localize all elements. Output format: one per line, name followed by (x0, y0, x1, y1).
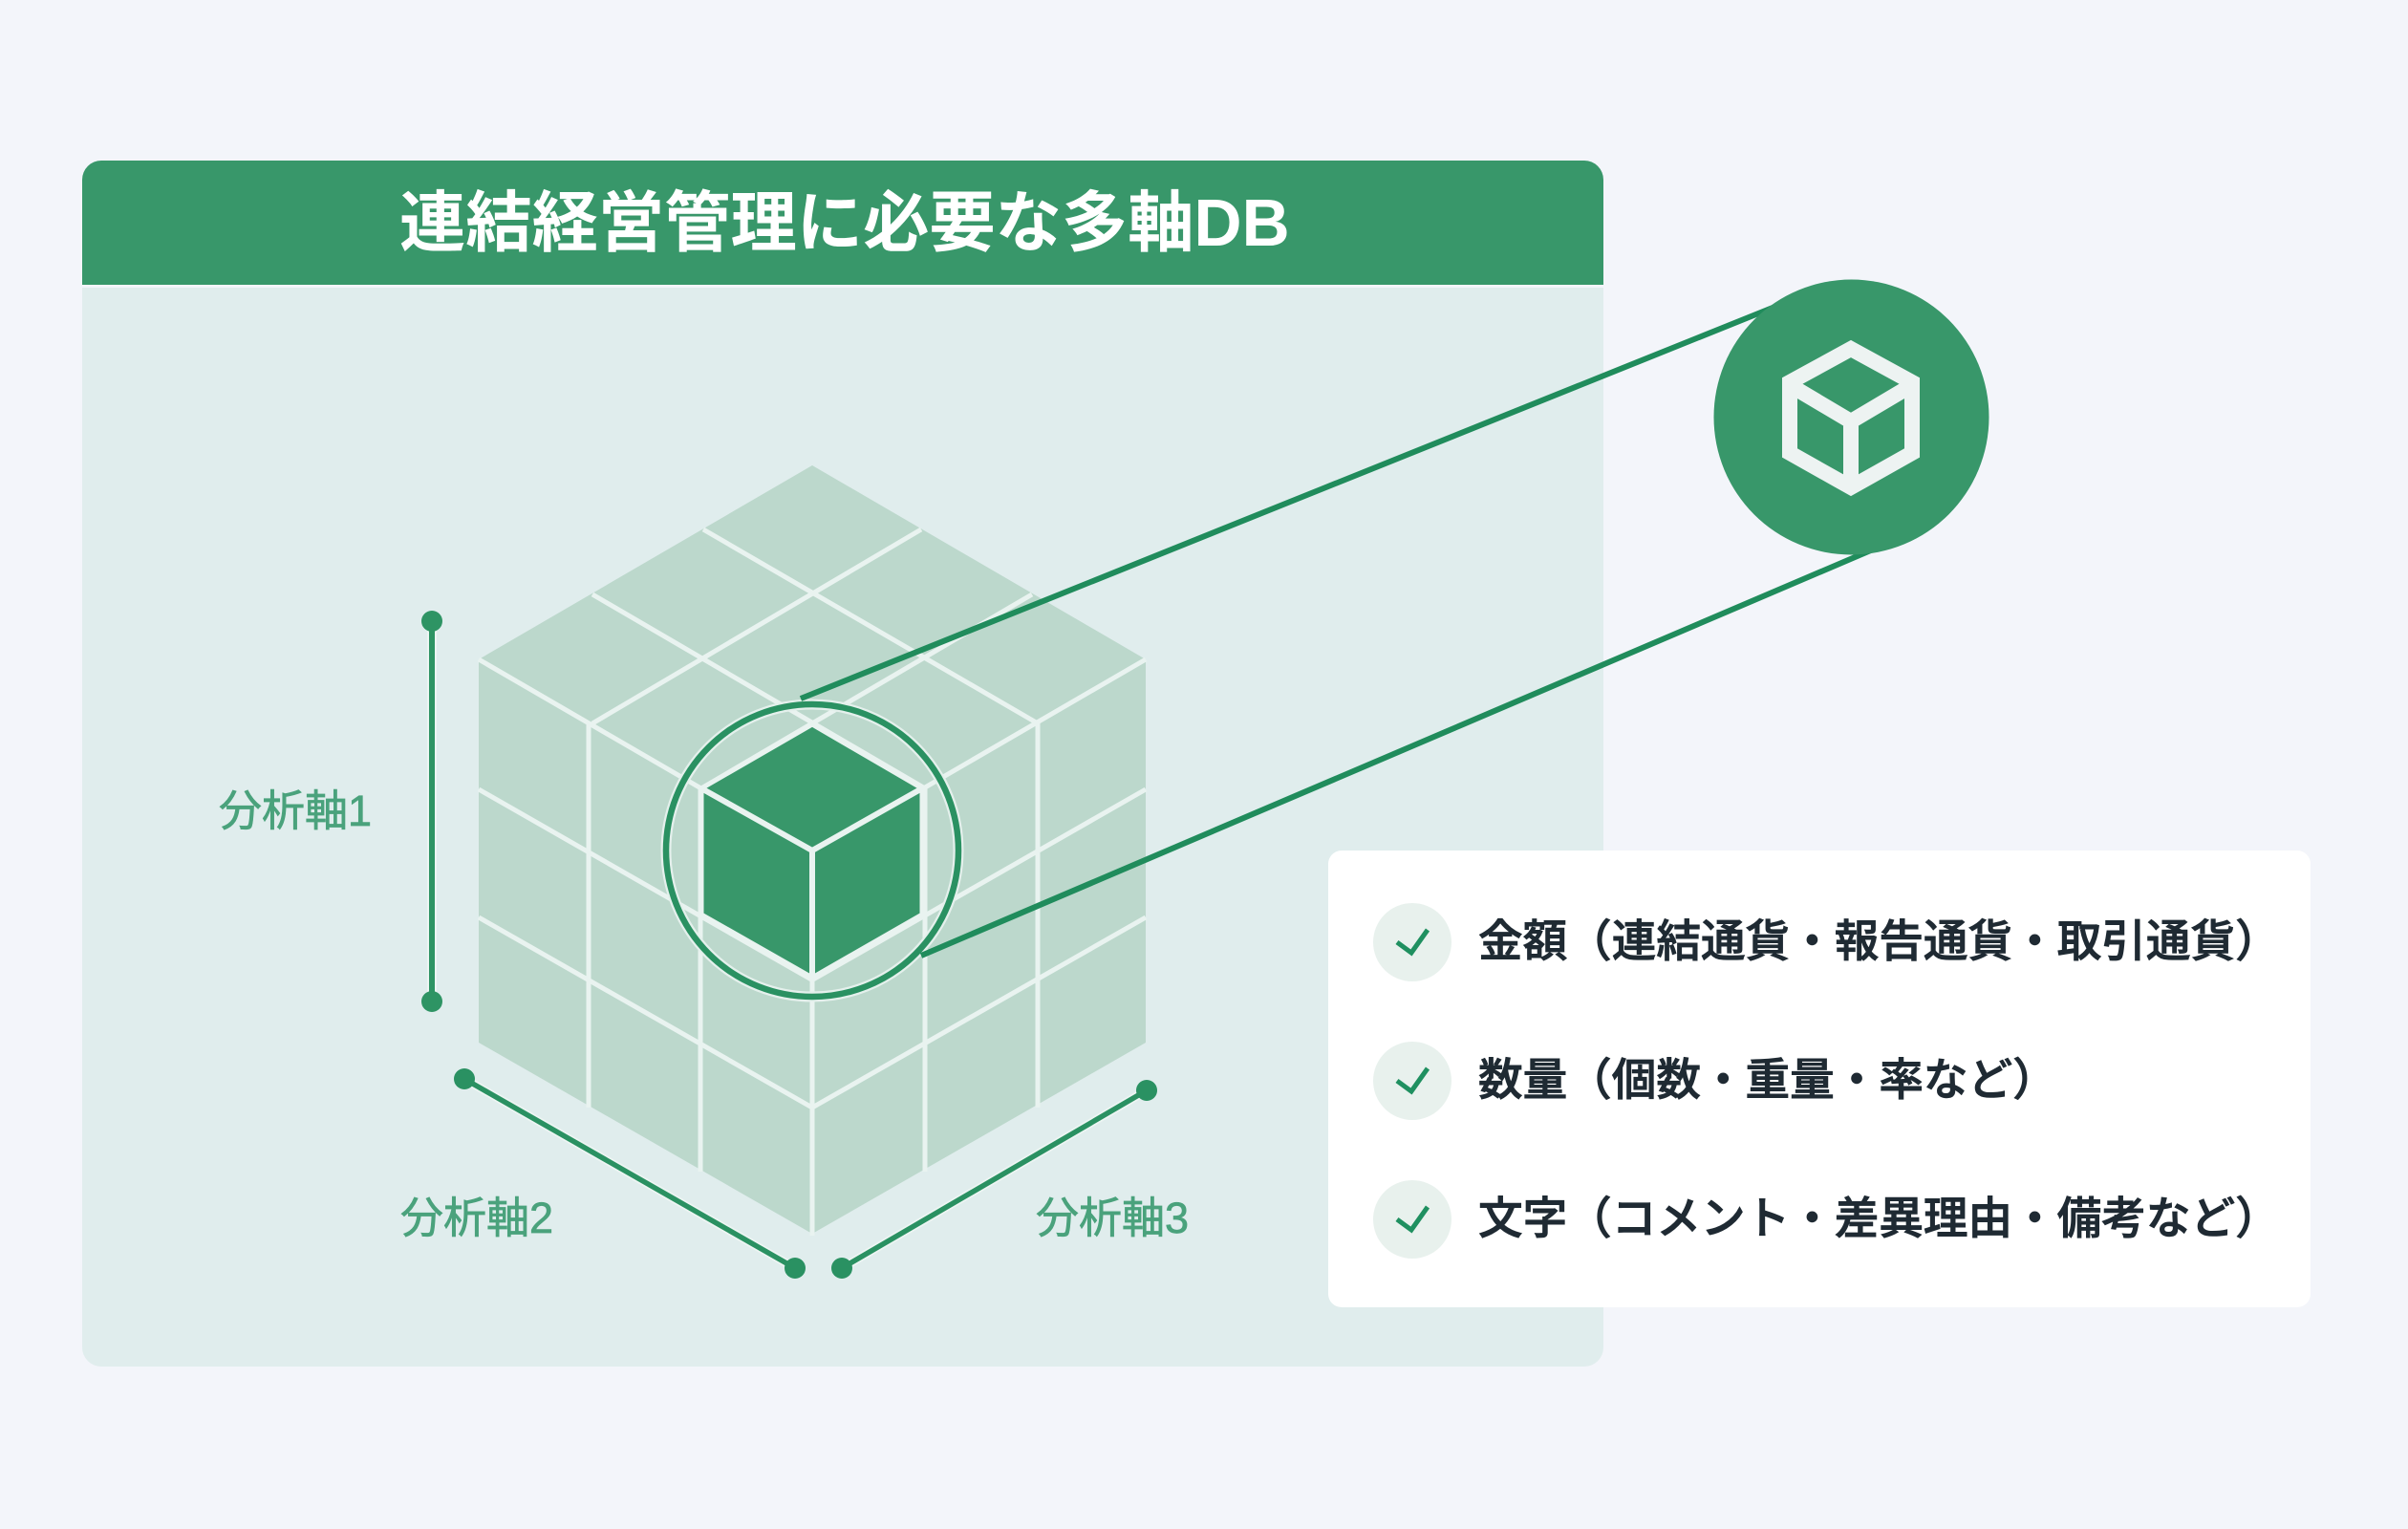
panel body (82, 288, 1603, 1367)
axis 2 line (454, 1068, 806, 1279)
card: data types (1328, 851, 2311, 1307)
cube grid: 3x3x3 (479, 465, 1146, 1236)
axis 1 line (421, 611, 442, 1012)
axis 1 label: 分析軸1 (219, 786, 372, 835)
item: quantity: 数量（個数・重量・率など） (1478, 1055, 2057, 1105)
item: amount: 金額（連結通貨・報告通貨・取引通貨） (1478, 916, 2280, 966)
title: 連結経営管理に必要な多軸DB (399, 185, 1290, 260)
item: text: 文字（コメント・差異理由・備考など） (1478, 1194, 2280, 1243)
panel header bar (82, 161, 1603, 285)
axis 2 label: 分析軸2 (400, 1194, 553, 1242)
highlighted small cube (701, 724, 922, 978)
panel: multi-axis DB (82, 161, 1603, 1367)
axis 3 label: 分析軸3 (1036, 1194, 1189, 1242)
item: amount (1373, 903, 2280, 981)
item: text (1373, 1180, 2280, 1259)
zoomed circle with cube icon (1714, 279, 1989, 554)
icon: cube outline (1790, 349, 1912, 487)
connector: top (801, 306, 1777, 699)
magnifier ring (666, 704, 958, 997)
item: quantity (1373, 1042, 2057, 1120)
axis 3 line (831, 1080, 1157, 1279)
connector: bottom (921, 547, 1880, 956)
